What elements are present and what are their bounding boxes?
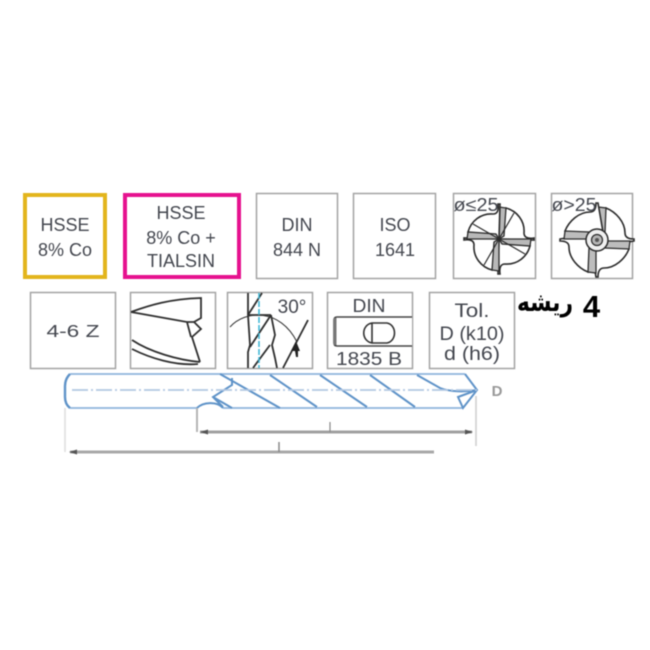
label: 4 flutes (517, 288, 601, 324)
badge: DIN 1835 B: 1835 B (336, 349, 402, 369)
badge: HSSE 8% Co (25, 195, 105, 277)
badge: tolerance: Tol. (454, 301, 490, 322)
badge: DIN 1835 B: DIN (352, 296, 386, 316)
diagram: twist drill (65, 374, 503, 454)
badge: ISO 1641 (354, 194, 436, 278)
badge: ISO 1641: ISO (379, 215, 411, 235)
badge: 4-6 Z: 4-6 Z (46, 321, 100, 341)
label: 4 flutes: ریشه (517, 288, 573, 318)
badge: HSSE 8% Co + TIALSIN: HSSE (156, 203, 206, 223)
centre line (72, 389, 478, 391)
badge: HSSE 8% Co + TIALSIN: TIALSIN (147, 251, 215, 271)
dimension: L (65, 408, 434, 454)
badge: ISO 1641: 1641 (375, 240, 415, 260)
badge: DIN 844 N: DIN (282, 215, 312, 235)
icon: 30 degree helix (228, 292, 312, 368)
dimension: l (197, 396, 476, 446)
icon: cutter section, diameter up to 25: ø≤25 (454, 195, 498, 215)
icon: cutter section, diameter up to 25 (454, 194, 536, 278)
badge: DIN 1835 B (328, 292, 412, 369)
badge: HSSE 8% Co: 8% Co (38, 240, 92, 260)
icon: cutter section, diameter over 25: ø>25 (552, 195, 596, 215)
drill body (65, 374, 477, 408)
dimension: D: D (492, 383, 503, 400)
badge: tolerance: D (k10) (440, 324, 504, 345)
badge: 4-6 Z (30, 292, 116, 368)
badge: tolerance: d (h6) (444, 344, 500, 365)
icon: cutter section, diameter over 25 (552, 194, 634, 278)
badge: HSSE 8% Co + TIALSIN (125, 195, 239, 277)
icon: shank with flat (334, 317, 412, 346)
badge: DIN 844 N (256, 194, 338, 278)
icon: drill point (130, 292, 216, 368)
badge: tolerance (430, 292, 514, 368)
badge: DIN 844 N: 844 N (273, 240, 321, 260)
badge: HSSE 8% Co + TIALSIN: 8% Co + (146, 228, 216, 248)
badge: HSSE 8% Co: HSSE (40, 215, 90, 235)
icon: 30 degree helix: 30° (278, 297, 306, 318)
label: 4 flutes: 4 (583, 289, 601, 324)
